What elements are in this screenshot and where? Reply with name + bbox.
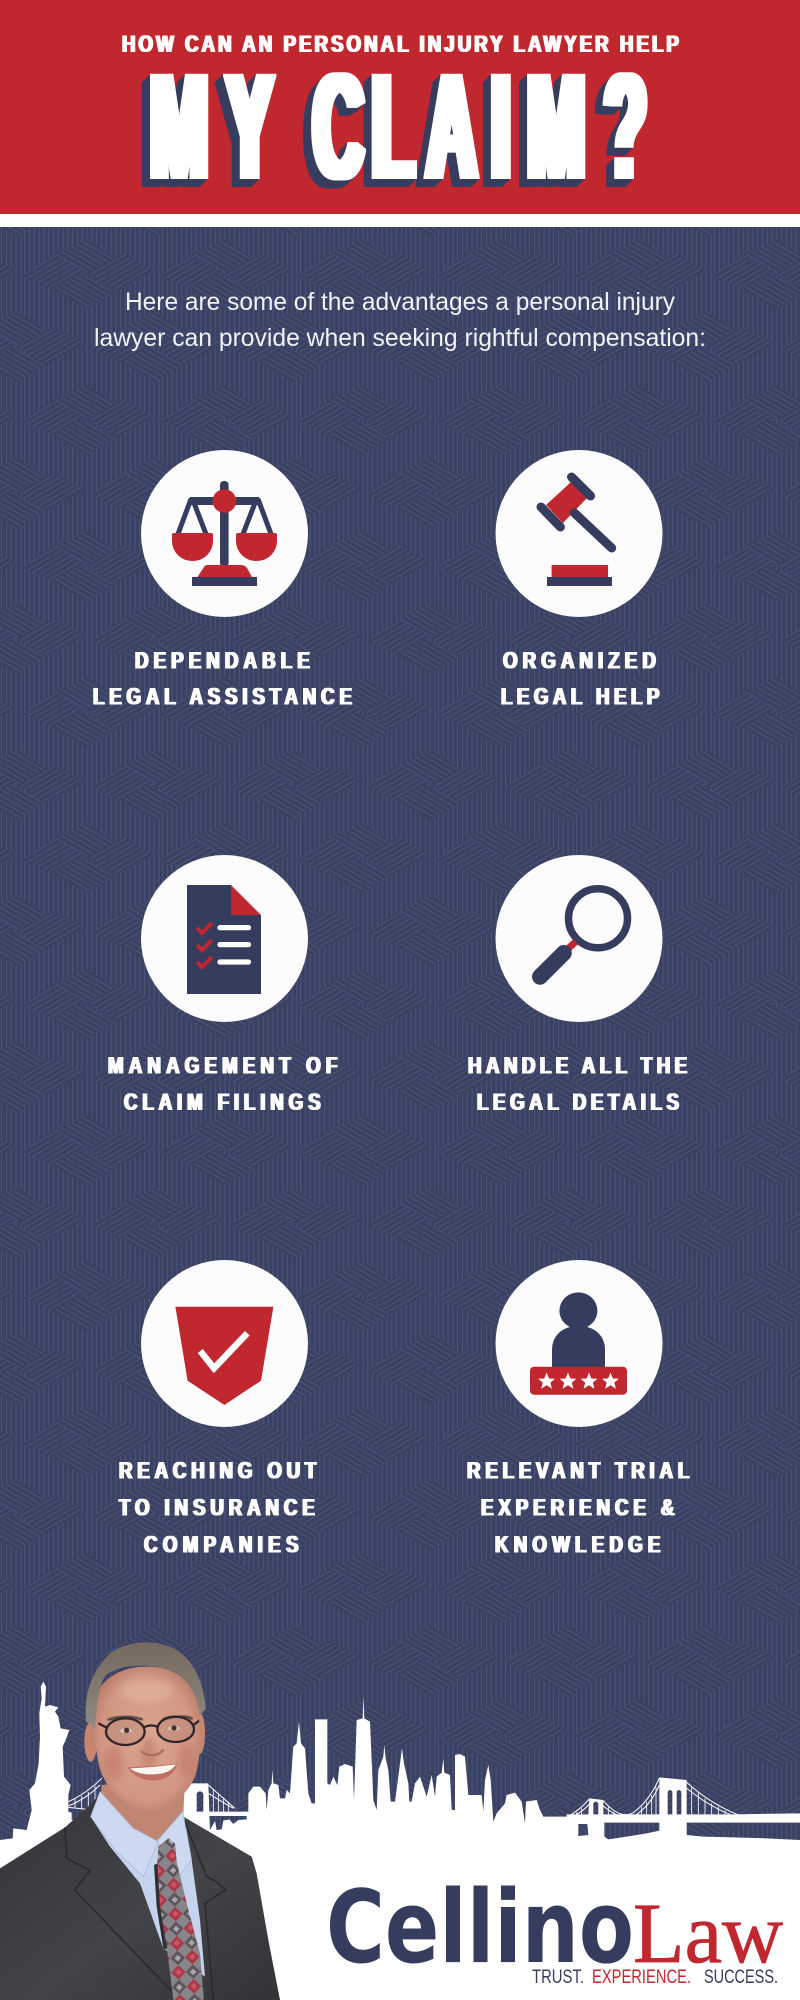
label: relevant trial experience and knowledge: RELEVANT TRIAL bbox=[467, 1457, 689, 1484]
glasses bbox=[98, 1717, 199, 1745]
logo wordmark: law: Law bbox=[633, 1885, 783, 1981]
heading: subtitle: HOW CAN AN PERSONAL INJURY LAWYER HELP bbox=[122, 31, 679, 58]
panel: reaching out to insurance companies bbox=[119, 1260, 316, 1558]
icon: shield with check bbox=[141, 1260, 308, 1427]
logo wordmark: cellino: Cellino bbox=[326, 1868, 634, 1986]
eyes bbox=[120, 1725, 180, 1733]
panel: relevant trial experience and knowledge bbox=[467, 1260, 689, 1558]
panel: dependable legal assistance bbox=[93, 450, 352, 710]
tagline: TRUST. bbox=[532, 1967, 584, 1988]
label: organized legal help: LEGAL HELP bbox=[501, 683, 659, 710]
label: reaching out to insurance companies: COMPANIES bbox=[144, 1531, 298, 1558]
label: relevant trial experience and knowledge bbox=[467, 1457, 689, 1558]
icon: gavel bbox=[496, 450, 662, 617]
panel: handle all the legal details bbox=[468, 855, 687, 1116]
face bbox=[94, 1667, 201, 1811]
suit jacket bbox=[0, 1793, 280, 2000]
label: handle all the legal details: LEGAL DETAILS bbox=[477, 1089, 679, 1116]
title: my claim: MY CLAIM? bbox=[150, 42, 647, 210]
label: management of claim filings: MANAGEMENT OF bbox=[108, 1052, 337, 1079]
ears bbox=[84, 1713, 205, 1762]
label: handle all the legal details: HANDLE ALL THE bbox=[468, 1052, 687, 1079]
icon: scales of justice bbox=[141, 450, 308, 617]
label: management of claim filings bbox=[108, 1052, 337, 1116]
icon: checklist document bbox=[141, 855, 308, 1022]
hair bbox=[86, 1642, 206, 1728]
label: dependable legal assistance: DEPENDABLE bbox=[135, 647, 310, 674]
eyebrows bbox=[108, 1716, 192, 1720]
logo: cellino law bbox=[326, 1868, 783, 1986]
header banner bbox=[0, 0, 800, 214]
collar bbox=[91, 1792, 192, 1877]
shirt shadow by tie bbox=[154, 1863, 168, 1950]
intro text: lawyer can provide when seeking rightful compensation: bbox=[94, 324, 706, 352]
lapels bbox=[65, 1820, 225, 2000]
label: reaching out to insurance companies bbox=[119, 1457, 316, 1558]
label: reaching out to insurance companies: TO INSURANCE bbox=[119, 1494, 315, 1521]
attorney portrait bbox=[0, 1642, 280, 2000]
label: handle all the legal details bbox=[468, 1052, 687, 1116]
skyline silhouette with statue and bridges bbox=[0, 1682, 800, 2000]
icon: magnifying glass bbox=[496, 855, 662, 1022]
label: dependable legal assistance: LEGAL ASSISTANCE bbox=[93, 683, 352, 710]
icon: person with star rating bbox=[496, 1260, 662, 1427]
white divider band bbox=[0, 214, 800, 227]
label: reaching out to insurance companies: REACHING OUT bbox=[119, 1457, 316, 1484]
intro text bbox=[94, 288, 706, 352]
label: dependable legal assistance bbox=[93, 647, 352, 710]
label: organized legal help bbox=[501, 647, 659, 710]
tagline: SUCCESS. bbox=[704, 1967, 778, 1988]
intro text: Here are some of the advantages a personal injury bbox=[125, 288, 675, 316]
label: relevant trial experience and knowledge: KNOWLEDGE bbox=[495, 1531, 660, 1558]
label: relevant trial experience and knowledge: EXPERIENCE & bbox=[481, 1494, 674, 1521]
panel: management of claim filings bbox=[108, 855, 337, 1116]
label: management of claim filings: CLAIM FILINGS bbox=[124, 1089, 321, 1116]
neck bbox=[101, 1777, 185, 1842]
smile bbox=[127, 1764, 177, 1781]
label: organized legal help: ORGANIZED bbox=[503, 647, 656, 674]
tie bbox=[157, 1838, 204, 2000]
face shading bbox=[103, 1680, 195, 1780]
panel: organized legal help bbox=[496, 450, 662, 710]
tagline bbox=[532, 1967, 778, 1988]
nose bbox=[142, 1750, 163, 1755]
shirt bbox=[91, 1792, 205, 1977]
tagline: EXPERIENCE. bbox=[592, 1967, 691, 1988]
